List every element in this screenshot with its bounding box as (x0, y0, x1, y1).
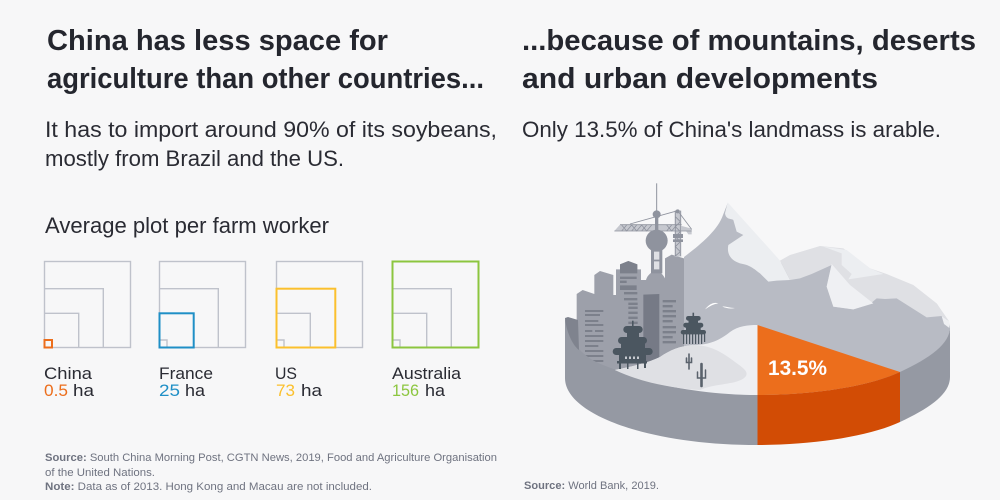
orange slice: side face (758, 372, 900, 445)
chart: Australia plot (392, 262, 478, 400)
disc side wall (565, 318, 758, 445)
text block: arable land: Only 13.5% of China's landmass is arable. (522, 117, 941, 142)
heading: right: ...because of mountains, deserts (522, 25, 976, 57)
text block: soybean imports: It has to import around 90% of its soybeans, (45, 117, 497, 142)
birds (705, 303, 735, 309)
chart: France plot (159, 262, 246, 400)
slice value label: 13.5% (768, 357, 827, 380)
city skyline (577, 183, 692, 377)
disc side wall right (900, 327, 950, 422)
pagoda left (613, 321, 653, 369)
heading: left (47, 25, 484, 95)
heading: right (522, 25, 976, 95)
chart: China plot: 0.5 (44, 381, 68, 400)
dark building at rim (565, 317, 579, 350)
cactus icons (686, 354, 706, 386)
chart: US plot: ha (301, 381, 323, 400)
mountain base and top surface (684, 203, 950, 395)
chart: France plot: ha (185, 381, 206, 400)
chart: France plot: 25 (159, 381, 180, 400)
footnote: left source and note: of the United Nations. (45, 467, 155, 479)
chart: US plot (275, 262, 362, 400)
pagoda right (681, 313, 706, 344)
chart: France plot: France (159, 364, 213, 383)
desert snow patch (615, 325, 758, 395)
text block: soybean imports: mostly from Brazil and the US. (45, 146, 344, 171)
footnote: left source and note: Note: Data as of 2013. Hong Kong and Macau are not included. (45, 481, 372, 493)
chart: China plot: China (44, 364, 93, 383)
footnote: left source and note (45, 452, 497, 493)
footnote: right source: Source: World Bank, 2019. (524, 480, 659, 492)
chart: US plot: 73 (276, 381, 295, 400)
chart: China plot (44, 262, 130, 400)
building window stripes (585, 277, 676, 362)
illustration: land disc with city and mountains (565, 183, 950, 445)
heading: left: agriculture than other countries... (47, 63, 484, 95)
chart: China plot: ha (73, 381, 95, 400)
snow on mountains (705, 202, 949, 328)
heading: right: and urban developments (522, 63, 878, 95)
footnote: left source and note: Source: South China Morning Post, CGTN News, 2019, Food and Agriculture Organisation (45, 452, 497, 464)
chart: Australia plot: Australia (392, 364, 462, 383)
construction crane (614, 209, 692, 257)
chart heading: Average plot per farm worker (45, 213, 329, 238)
chart: Australia plot: 156 (392, 381, 419, 400)
chart: US plot: US (275, 364, 297, 383)
orange slice: top face (758, 325, 900, 395)
chart: Australia plot: ha (425, 381, 446, 400)
TV tower (646, 183, 668, 273)
heading: left: China has less space for (47, 25, 388, 57)
text block: soybean imports (45, 117, 497, 171)
